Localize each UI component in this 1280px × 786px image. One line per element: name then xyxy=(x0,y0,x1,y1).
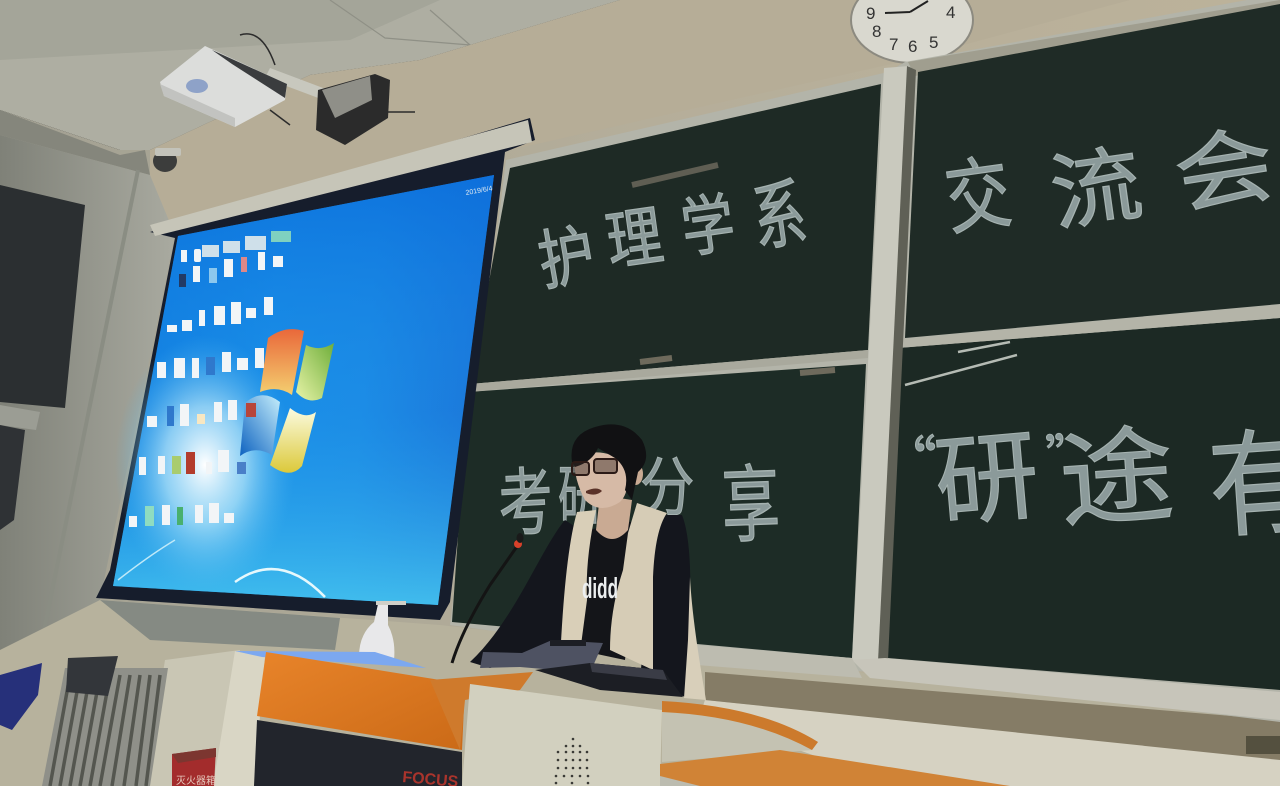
chalk text: “研”途有: 途 xyxy=(1054,390,1178,548)
projection screen casing xyxy=(96,118,535,620)
speaker holes xyxy=(555,738,589,784)
wall sensor xyxy=(1246,736,1280,754)
blackboard: top left xyxy=(470,84,881,384)
upper wall xyxy=(150,0,1130,235)
chalk text: 护理学系: 理 xyxy=(600,184,668,284)
ceiling xyxy=(0,0,620,175)
center frame post xyxy=(852,66,909,662)
orange top band xyxy=(257,652,465,750)
wall clock xyxy=(851,0,973,63)
chalk text: “研”途有: ” xyxy=(1043,415,1097,489)
podium xyxy=(213,651,662,786)
chalk text: 交流会 xyxy=(937,97,1280,251)
wall clock: 5 xyxy=(929,33,938,52)
wall clock: 6 xyxy=(908,37,917,56)
white front panel xyxy=(462,684,662,786)
chalk text: “研”途有: 研 xyxy=(928,395,1044,547)
chalk text: 考研分享: 享 xyxy=(720,437,781,559)
glasses xyxy=(572,459,617,475)
chalk text: 护理学系: 系 xyxy=(745,152,812,267)
blue lit top xyxy=(235,651,426,668)
system tray clock: 2019/6/4 xyxy=(465,185,493,197)
lower wall xyxy=(0,600,1280,786)
dark lower front xyxy=(254,720,462,786)
chalk text: 考研分享: 研 xyxy=(558,444,603,537)
desktop icons xyxy=(129,231,291,527)
chalk text: 护理学系: 学 xyxy=(675,171,740,272)
chalk text: “研”途有 xyxy=(878,389,1280,561)
chalk text: 交流会: 会 xyxy=(1165,97,1280,231)
mouth xyxy=(586,488,602,495)
adidas label: didd xyxy=(582,573,618,605)
chalk text: 考研分享: 分 xyxy=(640,437,694,529)
speaker xyxy=(470,424,706,700)
security camera xyxy=(153,148,181,172)
chalk scratches xyxy=(632,165,1017,385)
chalk text: 交流会: 流 xyxy=(1042,117,1149,249)
vest xyxy=(561,510,596,645)
chalk text: 护理学系 xyxy=(530,152,812,304)
left wall and window xyxy=(0,135,175,660)
blackboard: bottom right xyxy=(887,318,1280,690)
chalk text: 护理学系: 护 xyxy=(530,202,601,304)
chalk text: 交流会: 交 xyxy=(937,128,1017,251)
left white side panel xyxy=(213,651,265,786)
neck and face xyxy=(596,495,632,539)
sanitizer bottle xyxy=(359,601,406,660)
windows logo xyxy=(240,329,334,473)
chalk text: 考研分享 xyxy=(496,437,781,559)
projection screen desktop xyxy=(113,175,494,605)
swoosh xyxy=(235,569,325,597)
body sleeves and shirt xyxy=(470,520,580,668)
desk side xyxy=(660,701,1010,786)
radiator xyxy=(42,656,168,786)
hair xyxy=(571,424,646,500)
blue basket xyxy=(0,663,42,730)
screen glare xyxy=(115,335,295,595)
wall clock: 7 xyxy=(889,35,898,54)
board rail xyxy=(468,350,868,392)
wall clock: 8 xyxy=(872,22,881,41)
projector xyxy=(160,34,415,145)
chalkboard frames xyxy=(450,0,1280,722)
wall clock: 9 xyxy=(866,4,875,23)
wall clock: 4 xyxy=(946,3,955,22)
microphone xyxy=(452,533,524,663)
chalk text: “研”途有: “ xyxy=(878,417,941,503)
chalk text: 考研分享: 考 xyxy=(496,442,555,552)
fire extinguisher box xyxy=(172,748,216,786)
blackboard: top right xyxy=(905,4,1280,338)
blackboard: bottom left xyxy=(452,364,866,658)
lectern device xyxy=(480,640,683,697)
